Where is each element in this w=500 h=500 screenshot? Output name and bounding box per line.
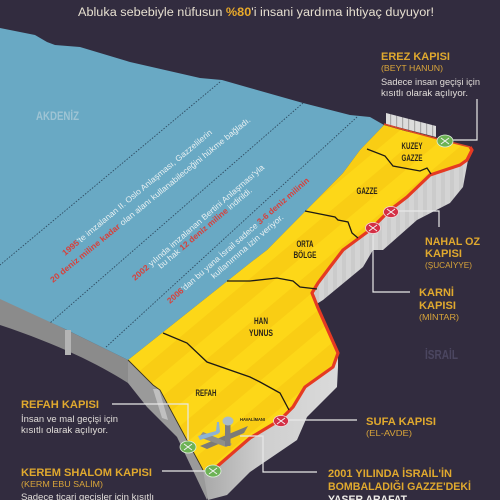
yellow land bbox=[128, 125, 472, 470]
label: Sufa: SUFA KAPISI bbox=[366, 416, 436, 428]
label: Havalimanı: HAVALİMANI bbox=[240, 416, 266, 423]
icon: Refah open gate bbox=[180, 441, 196, 453]
icon: Nahal Oz closed gate bbox=[384, 206, 398, 218]
label: Karni bbox=[419, 286, 459, 322]
label: İsrail: İSRAİL bbox=[425, 347, 458, 362]
district line: Han Yunus / Refah bbox=[163, 333, 289, 410]
east wall of strip: north section bbox=[312, 147, 472, 305]
district line: Orta / Han Yunus bbox=[227, 278, 317, 289]
connector: Kerem Shalom bbox=[162, 470, 205, 472]
district names: HAN bbox=[254, 316, 268, 326]
label: Sufa: (EL-AVDE) bbox=[366, 429, 412, 438]
label: Erez: EREZ KAPISI bbox=[381, 51, 450, 63]
label: Nahal Oz: KAPISI bbox=[425, 248, 462, 260]
text: 1995 limit: 1995'te imzalanan II. Oslo Anlaşması, Gazzelilerin bbox=[61, 128, 214, 258]
icon: Karni closed gate bbox=[366, 222, 380, 234]
label: Yaser Arafat airport: BOMBALADIĞI GAZZE'DEKİ bbox=[328, 480, 471, 493]
connector: airport bbox=[240, 436, 317, 472]
label: Karni: (MİNTAR) bbox=[419, 312, 459, 322]
label: Nahal Oz: NAHAL OZ bbox=[425, 236, 480, 248]
light joint on sea wall bbox=[65, 330, 71, 355]
label: Refah: kısıtlı olarak açılıyor. bbox=[21, 425, 108, 435]
label: Erez: kısıtlı olarak açılıyor. bbox=[381, 88, 468, 98]
label: Sufa bbox=[366, 416, 436, 438]
icon: Kerem Shalom open gate bbox=[205, 465, 221, 477]
district names: KUZEY bbox=[402, 141, 422, 151]
district names: GAZZE bbox=[356, 186, 378, 196]
label: Nahal Oz bbox=[425, 236, 480, 270]
label: Yaser Arafat airport bbox=[328, 467, 471, 500]
label: Kerem Shalom bbox=[21, 467, 154, 500]
border: north thin bbox=[384, 124, 470, 147]
connector: Nahal Oz bbox=[398, 211, 439, 227]
dotted limit line 2 bbox=[50, 103, 303, 323]
border: east thick red bbox=[213, 147, 472, 470]
district line: Gazze / Orta bbox=[305, 211, 358, 238]
text: 2006 limit: kullanımına izin veriyor. bbox=[209, 213, 286, 281]
text: 2002 limit: 2002 yılında imzalanan Bertini Anlaşması'yla bbox=[130, 163, 266, 283]
connector: Erez bbox=[452, 99, 477, 140]
icon: Sufa closed gate bbox=[274, 416, 288, 426]
label: Erez: (BEYT HANUN) bbox=[381, 64, 443, 73]
label: Erez bbox=[381, 51, 480, 98]
border: west dark bbox=[128, 360, 203, 470]
label: Refah: REFAH KAPISI bbox=[21, 399, 99, 411]
text: 2002 limit: bu hak 12 deniz miline indirildi. bbox=[156, 186, 254, 271]
label: Karni: KARNİ bbox=[419, 286, 454, 299]
district line: Kuzey Gazze / Gazze bbox=[367, 149, 431, 174]
title: Abluka sebebiyle nüfusun %80'i insani yardıma ihtiyaç duyuyor! bbox=[78, 7, 434, 19]
connector: Karni bbox=[373, 235, 410, 292]
text: 2006 limit: 2006'dan bu yana İsrail sadece 3-6 deniz milinin bbox=[165, 175, 311, 306]
label: Refah: İnsan ve mal geçişi için bbox=[21, 414, 118, 424]
dotted limit line 3 bbox=[105, 117, 357, 348]
east wall of strip: south section bbox=[203, 353, 338, 500]
west wall of strip bbox=[128, 360, 213, 500]
label: Kerem Shalom: (KERM EBU SALİM) bbox=[21, 479, 103, 489]
district names: REFAH bbox=[196, 388, 216, 398]
runway cross bbox=[199, 432, 232, 447]
district names: GAZZE bbox=[402, 153, 422, 163]
icon: airport bbox=[198, 416, 266, 449]
Gaza strip land bbox=[128, 124, 472, 470]
label: AKDENİZ: AKDENİZ bbox=[36, 108, 79, 123]
sea wall: grey edge under the sea bbox=[0, 298, 132, 384]
sea surface bbox=[0, 28, 384, 360]
fence at Erez bbox=[386, 113, 436, 137]
label: Yaser Arafat airport: 2001 YILINDA İSRAİL'İN bbox=[328, 467, 452, 480]
runway bbox=[200, 426, 248, 449]
connector: Refah bbox=[112, 404, 188, 440]
tower head bbox=[222, 416, 234, 426]
connector: Sufa bbox=[288, 419, 357, 421]
district names bbox=[196, 141, 422, 398]
district names: YUNUS bbox=[249, 328, 273, 338]
label: Kerem Shalom: KEREM SHALOM KAPISI bbox=[21, 467, 152, 479]
tower bbox=[225, 424, 230, 446]
map: sea panel bbox=[0, 28, 384, 360]
icon: Erez open gate bbox=[437, 135, 453, 147]
label: Refah bbox=[21, 399, 118, 435]
text: 1995 limit: 20 deniz miline kadar olan alanı kullanabileceğini hükme bağladı. bbox=[49, 115, 252, 285]
plane bbox=[198, 422, 220, 440]
label: Nahal Oz: (ŞUCAİYYE) bbox=[425, 260, 472, 270]
district names: ORTA bbox=[296, 239, 314, 249]
label: Erez: Sadece insan geçişi için bbox=[381, 77, 480, 87]
dotted limit line 1 bbox=[0, 82, 220, 265]
label: Karni: KAPISI bbox=[419, 300, 456, 312]
light joint on west wall bbox=[153, 389, 168, 420]
district names: BÖLGE bbox=[294, 250, 316, 260]
